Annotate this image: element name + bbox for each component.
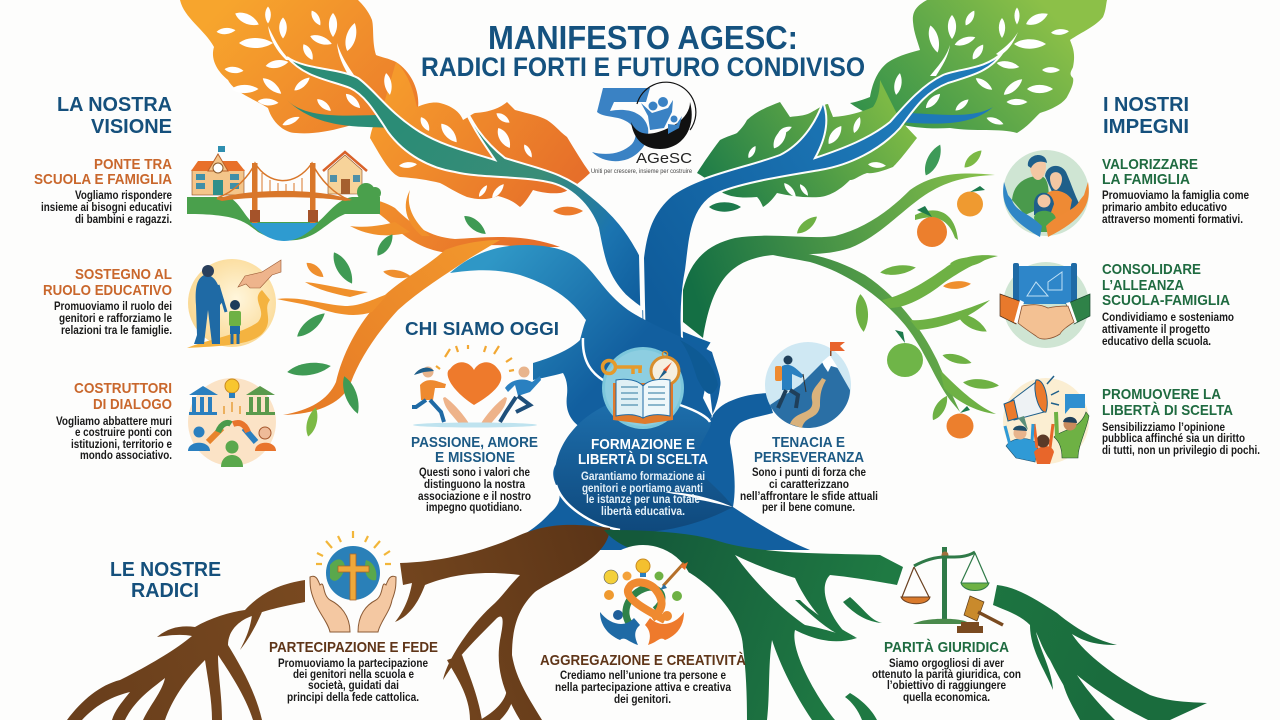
text: ponte tra scuola e famiglia: di bambini e ragazzi. [75,214,172,226]
text: promuovere la liberta di scelta: Sensibilizziamo l’opinione [1102,422,1225,434]
text: tenacia e perseveranza: ci caratterizzano [769,479,849,491]
text: costruttori di dialogo: DI DIALOGO [93,396,172,413]
text: formazione e liberta di scelta: genitori e portiamo avanti [582,483,703,495]
icon: heart with runners and hands [412,345,541,428]
text: tenacia e perseveranza: PERSEVERANZA [754,449,864,466]
text: sostegno al ruolo educativo: Promuoviamo il ruolo dei [54,301,172,313]
tree crown: left orange foliage [180,0,590,215]
tree crown: right green foliage [697,0,1107,207]
text: formazione e liberta di scelta: FORMAZIONE E [591,436,695,453]
text: parita giuridica: PARITÀ GIURIDICA [884,639,1009,656]
white leaves [746,8,1069,199]
text: formazione e liberta di scelta: LIBERTÀ DI SCELTA [578,451,708,468]
text: aggregazione e creativita: AGGREGAZIONE E CREATIVITÀ [540,652,746,669]
text: costruttori di dialogo: mondo associativo. [80,450,172,462]
text: valorizzare la famiglia: LA FAMIGLIA [1102,171,1190,188]
panel: chi siamo oggi [405,318,878,518]
text: passione amore e missione: E MISSIONE [435,449,515,466]
heading: le nostre radici: LE NOSTRE [110,559,221,581]
heading: la nostra visione: LA NOSTRA [57,94,172,116]
text: valorizzare la famiglia: primario ambito educativo [1102,202,1227,214]
heading: i nostri impegni: I NOSTRI [1103,94,1189,116]
text: consolidare alleanza scuola-famiglia: L’ALLEANZA [1102,277,1184,294]
text: parita giuridica: quella economica. [903,692,990,704]
text: aggregazione e creativita: dei genitori. [614,694,671,706]
apples [887,186,985,438]
text: ponte tra scuola e famiglia: PONTE TRA [94,156,172,173]
title: MANIFESTO AGESC: [488,19,798,56]
icon: megaphone and people [1003,376,1089,464]
text: valorizzare la famiglia: Promuoviamo la famiglia come [1102,190,1249,202]
text: partecipazione e fede: società, guidati dai [308,680,399,692]
text: sostegno al ruolo educativo: relazioni tra le famiglie. [61,325,172,337]
icon: handshake over blueprint [1000,262,1090,348]
text: passione amore e missione: impegno quotidiano. [426,502,522,514]
text: tenacia e perseveranza [740,434,878,514]
text: valorizzare la famiglia [1102,156,1249,226]
logo AGeSC 50: Uniti per crescere, insieme per costruire [591,169,693,175]
text: valorizzare la famiglia: VALORIZZARE [1102,156,1198,173]
logo AGeSC 50 [591,82,696,175]
text: sostegno al ruolo educativo: genitori e rafforziamo le [59,313,172,325]
text: consolidare alleanza scuola-famiglia: attivamente il progetto [1102,324,1210,336]
text: passione amore e missione: distinguono la nostra [424,479,526,491]
text: consolidare alleanza scuola-famiglia: CONSOLIDARE [1102,261,1201,278]
icon: parent and child with guiding hand [187,259,281,348]
text: ponte tra scuola e famiglia: Vogliamo rispondere [75,190,172,202]
text: consolidare alleanza scuola-famiglia [1102,261,1234,348]
title: RADICI FORTI E FUTURO CONDIVISO [421,52,865,82]
tree branch: right green with apples [683,142,999,438]
text: aggregazione e creativita: Crediamo nell’unione tra persone e [560,670,726,682]
icon: climber on mountain [765,342,851,428]
text: formazione e liberta di scelta [578,436,708,518]
roots: green right [604,530,1207,720]
text: partecipazione e fede: PARTECIPAZIONE E FEDE [269,639,438,656]
text: tenacia e perseveranza: Sono i punti di forza che [752,467,866,479]
text: formazione e liberta di scelta: Garantiamo formazione ai [581,471,705,483]
text: parita giuridica [872,639,1021,704]
text: parita giuridica: ottenuto la parità giuridica, con [872,669,1021,681]
leaves on green branch [709,142,999,422]
text: sostegno al ruolo educativo: SOSTEGNO AL [75,266,172,283]
text: consolidare alleanza scuola-famiglia: educativo della scuola. [1102,336,1211,348]
text: sostegno al ruolo educativo: RUOLO EDUCATIVO [43,282,172,299]
text: consolidare alleanza scuola-famiglia: Condividiamo e sosteniamo [1102,312,1234,324]
text: promuovere la liberta di scelta [1102,386,1260,457]
tree trunk: central swirl [450,245,810,550]
text: costruttori di dialogo: COSTRUTTORI [74,380,172,397]
text: aggregazione e creativita [540,652,746,706]
text: passione amore e missione: PASSIONE, AMORE [411,434,538,451]
panel: la nostra visione [34,94,381,467]
text: costruttori di dialogo: Vogliamo abbattere muri [56,416,172,428]
heading: le nostre radici [110,559,221,602]
icon: key compass and open book [602,347,684,429]
text: partecipazione e fede: principi della fede cattolica. [287,692,419,704]
text: promuovere la liberta di scelta: LIBERTÀ DI SCELTA [1102,402,1233,419]
text: partecipazione e fede: dei genitori nella scuola e [293,669,414,681]
icon: bridge between school and house [187,146,381,241]
text: formazione e liberta di scelta: le istanze per una totale [586,494,700,506]
text: tenacia e perseveranza: nell’affrontare le sfide attuali [740,491,878,503]
heading: le nostre radici: RADICI [131,580,199,602]
text: ponte tra scuola e famiglia: insieme ai bisogni educativi [41,202,172,214]
heading: i nostri impegni: IMPEGNI [1103,116,1189,138]
icon: dialogue between institutions and people [188,378,276,467]
panel: le nostre radici [110,531,1021,706]
text: partecipazione e fede [269,639,438,704]
text: partecipazione e fede: Promuoviamo la partecipazione [278,658,428,670]
text: ponte tra scuola e famiglia: SCUOLA E FAMIGLIA [34,171,172,188]
text: costruttori di dialogo: istituzioni, territorio e [71,439,172,451]
text: promuovere la liberta di scelta: pubblica affinché sia un diritto [1102,433,1245,445]
white leaves [216,6,583,215]
text: parita giuridica: Siamo orgogliosi di aver [889,658,1004,670]
text: costruttori di dialogo: e costruire ponti con [75,427,172,439]
leaves on orange branch [286,212,489,438]
heading: i nostri impegni [1103,94,1189,138]
text: promuovere la liberta di scelta: PROMUOVERE LA [1102,386,1221,403]
heading: la nostra visione: VISIONE [91,116,172,138]
tree trunk: upper blue limbs [287,52,1003,355]
text: aggregazione e creativita: nella partecipazione attiva e creativa [555,682,732,694]
text: formazione e liberta di scelta: libertà educativa. [601,506,685,518]
icon: family in protective hands [1003,150,1089,237]
text: passione amore e missione: Questi sono i valori che [419,467,530,479]
text: sostegno al ruolo educativo [43,266,172,337]
text: consolidare alleanza scuola-famiglia: SCUOLA-FAMIGLIA [1102,292,1230,309]
icon: globe with cross in hands [310,531,396,632]
heading: la nostra visione [57,94,172,138]
text: costruttori di dialogo [56,380,172,462]
heading: chi siamo oggi: CHI SIAMO OGGI [405,318,559,339]
tree branch: left orange [277,190,560,438]
text: tenacia e perseveranza: per il bene comune. [762,502,855,514]
text: ponte tra scuola e famiglia [34,156,172,226]
panel: i nostri impegni [1000,94,1260,464]
logo AGeSC 50: AGeSC [636,150,692,167]
title [421,19,865,82]
text: valorizzare la famiglia: attraverso momenti formativi. [1102,214,1243,226]
icon: scales of justice and gavel [901,547,1003,633]
roots: brown left [67,525,610,720]
text: passione amore e missione [411,434,538,514]
text: parita giuridica: l’obiettivo di raggiungere [887,680,1006,692]
text: passione amore e missione: associazione e il nostro [418,491,531,503]
icon: interlocked people, bulbs and brush [591,545,695,649]
text: tenacia e perseveranza: TENACIA E [772,434,845,451]
